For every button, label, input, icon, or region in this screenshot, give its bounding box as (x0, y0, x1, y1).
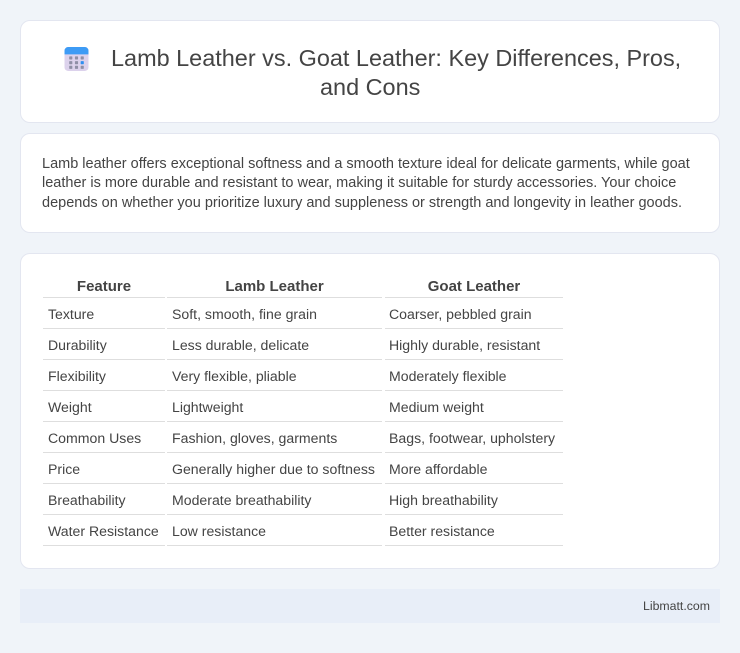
panel: summary (20, 133, 720, 233)
comparison table (43, 278, 563, 546)
row: Price: More affordable (389, 461, 487, 477)
row: Flexibility: Flexibility (48, 368, 106, 384)
footer credit: Libmatt.com (643, 599, 710, 613)
row: Weight: Lightweight (172, 399, 243, 415)
header row (77, 278, 520, 295)
row: Texture (48, 306, 532, 322)
row: Water Resistance: Water Resistance (48, 523, 159, 539)
icon: calendar (64, 47, 88, 71)
row: Flexibility: Very flexible, pliable (172, 368, 297, 384)
row: Breathability (48, 492, 498, 508)
row: Durability: Highly durable, resistant (389, 337, 540, 353)
row: Durability (48, 337, 540, 353)
row: Durability: Less durable, delicate (172, 337, 309, 353)
row: Water Resistance: Low resistance (172, 523, 266, 539)
panel: comparison table (20, 253, 720, 569)
row: Texture: Soft, smooth, fine grain (172, 306, 317, 322)
row: Price (48, 461, 487, 477)
row: Water Resistance (48, 523, 495, 539)
title (111, 45, 681, 100)
row: Common Uses: Bags, footwear, upholstery (389, 430, 555, 446)
row: Breathability: Breathability (48, 492, 126, 508)
row: Water Resistance: Better resistance (389, 523, 495, 539)
summary text: leather is more durable and resistant to wear, making it suitable for sturdy accessories. Your choice (42, 175, 676, 191)
row: Breathability: High breathability (389, 492, 498, 508)
row: Common Uses: Fashion, gloves, garments (172, 430, 337, 446)
summary text: Lamb leather offers exceptional softness and a smooth texture ideal for delicate garments, while goat (42, 156, 690, 172)
row: Weight: Medium weight (389, 399, 484, 415)
header row: Lamb Leather (225, 278, 324, 295)
row: Flexibility (48, 368, 507, 384)
row: Price: Generally higher due to softness (172, 461, 375, 477)
row: Common Uses: Common Uses (48, 430, 141, 446)
row: Durability: Durability (48, 337, 107, 353)
panel: title card (20, 20, 720, 123)
row: Weight: Weight (48, 399, 92, 415)
summary text: depends on whether you prioritize luxury and suppleness or strength and longevity in leather goods. (42, 194, 682, 210)
row: Common Uses (48, 430, 555, 446)
header row: Goat Leather (428, 278, 520, 295)
row: Texture: Texture (48, 306, 94, 322)
row: Texture: Coarser, pebbled grain (389, 306, 532, 322)
row: Weight (48, 399, 484, 415)
title: and Cons (320, 74, 420, 100)
row: Price: Price (48, 461, 80, 477)
footer bar (20, 589, 720, 623)
row: Breathability: Moderate breathability (172, 492, 311, 508)
title: Lamb Leather vs. Goat Leather: Key Differences, Pros, (111, 45, 681, 71)
header row: Feature (77, 278, 131, 295)
summary text (42, 156, 690, 210)
row: Flexibility: Moderately flexible (389, 368, 507, 384)
